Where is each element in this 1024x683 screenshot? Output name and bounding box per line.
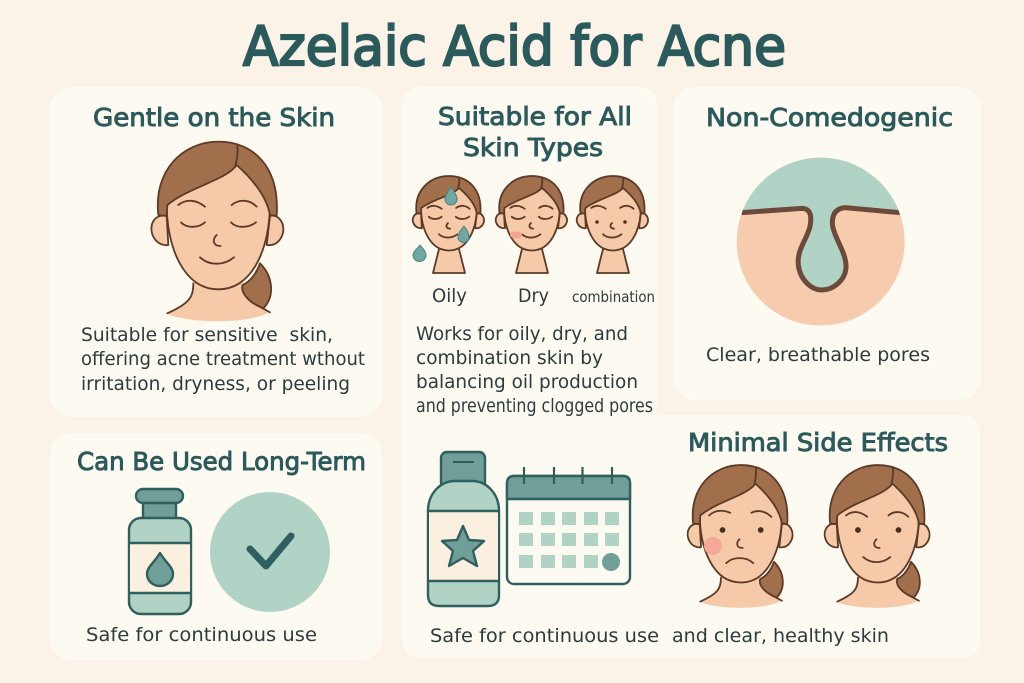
description: skin types [416, 323, 653, 417]
description: non-comedogenic: Clear, breathable pores [706, 344, 930, 366]
title: Azelaic Acid for Acne [243, 15, 786, 78]
heading: minimal side effects: Minimal Side Effects [688, 428, 948, 457]
panel: can be used long-term [50, 433, 382, 660]
panel: skin types and side effects [402, 87, 980, 658]
icon: check mark in circle [210, 492, 330, 612]
skin type labels: combination [572, 288, 655, 306]
heading: suitable for all skin types: Suitable for All [438, 102, 632, 131]
icon: combination face [577, 176, 648, 273]
icon: calendar [507, 467, 630, 584]
skin type labels: Dry [518, 285, 549, 307]
icon: relaxed face [151, 142, 283, 321]
heading: suitable for all skin types: Skin Types [463, 133, 603, 162]
description: side effects: Safe for continuous use [430, 625, 659, 647]
icon: bottle with drop [129, 489, 191, 614]
description: gentle on the skin: irritation, dryness, or peeling [81, 373, 350, 395]
description: skin types: and preventing clogged pores [416, 395, 653, 417]
description: skin types: Works for oily, dry, and [416, 323, 628, 345]
icon: irritated face [688, 465, 793, 608]
description: side effects: and clear, healthy skin [672, 625, 889, 647]
description: skin types: combination skin by [416, 347, 603, 369]
heading: suitable for all skin types [438, 102, 632, 162]
heading: can be used long-term: Can Be Used Long-Term [77, 447, 366, 476]
description: gentle on the skin: Suitable for sensitive skin, [81, 324, 333, 346]
description: long-term: Safe for continuous use [86, 624, 317, 646]
description: skin types: balancing oil production [416, 371, 638, 393]
panel: gentle on the skin [50, 87, 382, 417]
panel: non-comedogenic [673, 87, 981, 400]
heading: non-comedogenic: Non-Comedogenic [706, 103, 953, 132]
icon: bottle with star [428, 452, 499, 606]
icon: dry face [496, 176, 567, 273]
skin type labels: Oily [432, 285, 467, 307]
icon: clear pore diagram [736, 158, 905, 326]
icon: healthy face [825, 465, 930, 608]
description: gentle on the skin [81, 324, 365, 395]
skin type labels [432, 285, 655, 307]
description: side effects [430, 625, 889, 647]
description: gentle on the skin: offering acne treatment wthout [81, 348, 365, 370]
heading: gentle on the skin: Gentle on the Skin [93, 103, 335, 132]
icon: oily face [413, 176, 484, 273]
